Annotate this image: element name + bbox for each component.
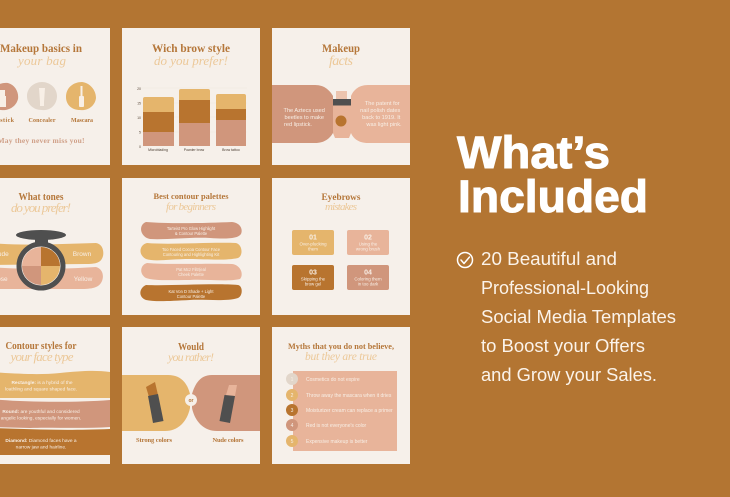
lower swatch band xyxy=(0,267,103,289)
palette strip 3 xyxy=(141,263,242,280)
myth 1 xyxy=(286,373,360,385)
script: but they are true: but they are true xyxy=(305,351,377,363)
script: your bag: your bag xyxy=(16,53,66,68)
bar chart: 0 xyxy=(139,145,141,149)
icon: mascara xyxy=(66,82,96,110)
text: nail polish fact: was light pink. xyxy=(365,122,402,128)
myth 3: Moisturizer cream can replace a primer xyxy=(306,408,393,414)
panel: contour palettes xyxy=(122,178,260,315)
panel: contour styles xyxy=(0,327,110,464)
myth 4 xyxy=(286,419,366,431)
panel: brow style chart xyxy=(122,28,260,165)
heading: makeup: Makeup xyxy=(322,43,360,55)
band: round xyxy=(0,399,110,428)
card: mistake 04 xyxy=(347,265,389,290)
icon: strong lipstick xyxy=(146,382,164,423)
upper swatch band xyxy=(0,243,103,265)
script: you rather: you rather! xyxy=(167,350,214,364)
label: nude colors: Nude colors xyxy=(212,437,244,444)
bar chart: Brow tattoo xyxy=(222,148,240,152)
label: mascara: Mascara xyxy=(71,118,93,124)
myth 2 xyxy=(286,389,392,401)
script: facts: facts xyxy=(329,54,354,69)
bar chart xyxy=(137,87,247,152)
text: aztecs fact: red lipstick. xyxy=(284,122,312,128)
myth 2: 2 xyxy=(291,393,294,399)
card: mistake 04: Coloring them xyxy=(354,276,382,282)
right choice shape xyxy=(192,375,260,431)
bar chart: 5 xyxy=(139,130,141,134)
icon: nude lipstick xyxy=(220,385,237,423)
myth 3: 3 xyxy=(291,408,294,414)
list background xyxy=(293,371,397,451)
title: what's included: Included xyxy=(458,171,648,222)
icon: or badge: or xyxy=(188,398,194,404)
panel: makeup basics xyxy=(0,28,110,165)
script: do you prefer: do you prefer! xyxy=(11,200,71,215)
panel: eyebrow mistakes xyxy=(272,178,410,315)
heading: what tones: What tones xyxy=(18,191,64,203)
label: brown: Brown xyxy=(73,251,92,258)
card: mistake 02: Using the xyxy=(359,242,378,246)
left choice shape xyxy=(122,375,190,431)
title: what's included xyxy=(457,127,648,222)
icon: compact xyxy=(16,230,66,288)
card: mistake 01 xyxy=(292,230,334,255)
myth 5: 5 xyxy=(291,439,294,445)
panel: what tones xyxy=(0,178,110,315)
heading: eyebrows: Eyebrows xyxy=(322,193,361,203)
palette strip 3: Pat Mcz Filtr(eal xyxy=(176,267,206,272)
description text: Professional-Looking xyxy=(481,278,649,298)
left fact shape xyxy=(272,85,333,143)
right fact shape xyxy=(351,85,410,143)
bar chart: 20 xyxy=(137,87,141,91)
title: what's included: What’s xyxy=(457,127,610,178)
palette strip 4: Contour Palette xyxy=(177,294,206,299)
description text: 20 Beautiful and xyxy=(481,249,617,269)
panel: makeup facts xyxy=(272,28,410,165)
script: do you prefer: do you prefer! xyxy=(154,53,228,68)
heading: brow style: Wich brow style xyxy=(152,43,230,55)
myth 1: 1 xyxy=(291,377,294,383)
card: mistake 02 xyxy=(347,230,389,255)
card: mistake 02: 02 xyxy=(364,234,372,242)
band: diamond: narrow jaw and hairline. xyxy=(16,444,66,450)
bar chart: 10 xyxy=(137,116,141,120)
text: nail polish fact: nail polish dates xyxy=(360,108,400,114)
text: nail polish fact: The patent for xyxy=(365,101,400,107)
icon: lipstick xyxy=(0,83,18,110)
card: mistake 04: in too dark xyxy=(358,282,379,286)
card: mistake 04: 04 xyxy=(364,270,372,276)
card: mistake 01: them xyxy=(308,246,318,252)
palette strip 2: Too Faced Cocoa Contour Face xyxy=(162,247,221,252)
myth 5 xyxy=(286,435,368,447)
icon: check circle xyxy=(458,252,472,268)
palette strip 1: & Contour Palette xyxy=(175,231,208,236)
bar chart: Microblading xyxy=(148,148,168,152)
heading: would: Would xyxy=(178,341,204,353)
myth 1: Cosmetics do not expire xyxy=(306,377,360,383)
heading: contour palettes: Best contour palettes xyxy=(154,191,229,201)
bar chart: 15 xyxy=(137,102,141,106)
myth 3 xyxy=(286,404,393,416)
text: nail polish fact: back to 1919. It xyxy=(362,115,401,121)
script: your face type: your face type xyxy=(8,349,74,364)
band: rectangle: Rectangle: is a hybrid of the xyxy=(11,380,73,386)
heading: contour styles: Contour styles for xyxy=(6,341,77,352)
palette strip 1 xyxy=(141,222,242,239)
band: diamond: Diamond: Diamond faces have a xyxy=(5,438,77,444)
icon: nail polish bottle xyxy=(333,91,351,138)
card: mistake 03: brow gel xyxy=(305,282,321,286)
panel: myths xyxy=(272,327,410,464)
palette strip 4 xyxy=(140,284,242,301)
myth 4: Red is not everyone's color xyxy=(306,423,366,429)
description text: Social Media Templates xyxy=(481,307,676,327)
label: concealer: Concealer xyxy=(28,118,56,124)
card: mistake 02: wrong brush xyxy=(356,246,381,252)
description text: to Boost your Offers xyxy=(481,336,645,356)
palette strip 3: Cheek Palette xyxy=(178,272,205,277)
myth 2: Throw away the mascara when it dries xyxy=(306,393,392,399)
palette strip 4: Kat Von D Shade + Light xyxy=(169,289,214,294)
label: strong colors: Strong colors xyxy=(136,437,172,444)
palette strip 2: Contouring and Highlighting Kit xyxy=(163,252,220,257)
description text xyxy=(481,249,676,385)
heading: makeup basics: Makeup basics in xyxy=(0,43,83,55)
palette strip 1: Tarteist Pro Glow Highlight xyxy=(167,226,216,231)
icon: concealer xyxy=(27,82,57,110)
heading: myths: Myths that you do not believe, xyxy=(288,341,394,351)
tagline: May they never miss you! xyxy=(0,136,84,145)
band: round: angelic looking, especially for women. xyxy=(1,416,81,422)
band: rectangle: loathling and square shaped face. xyxy=(5,386,77,392)
card: mistake 01: 01 xyxy=(309,234,317,242)
card: mistake 03 xyxy=(292,265,334,290)
text: aztecs fact: beetles to make xyxy=(284,115,324,121)
band: diamond xyxy=(0,428,110,455)
bar chart: Powder brow xyxy=(184,148,205,152)
script: for beginners: for beginners xyxy=(166,201,216,213)
palette strip 2 xyxy=(140,243,242,260)
myth 4: 4 xyxy=(291,423,294,429)
text: aztecs fact: The Aztecs used xyxy=(284,108,325,114)
band: rectangle xyxy=(0,371,110,398)
script: mistakes: mistakes xyxy=(325,201,357,213)
label: yellow: Yellow xyxy=(74,276,93,283)
myth 5: Expensive makeup is better xyxy=(306,439,368,445)
band: round: Round: are youthful and considered xyxy=(2,409,80,415)
card: mistake 03: Skipping the xyxy=(301,276,326,282)
card: mistake 01: Over-plucking xyxy=(299,242,327,246)
description text: and Grow your Sales. xyxy=(481,365,657,385)
card: mistake 03: 03 xyxy=(309,270,317,276)
panel: would you rather xyxy=(122,327,260,464)
